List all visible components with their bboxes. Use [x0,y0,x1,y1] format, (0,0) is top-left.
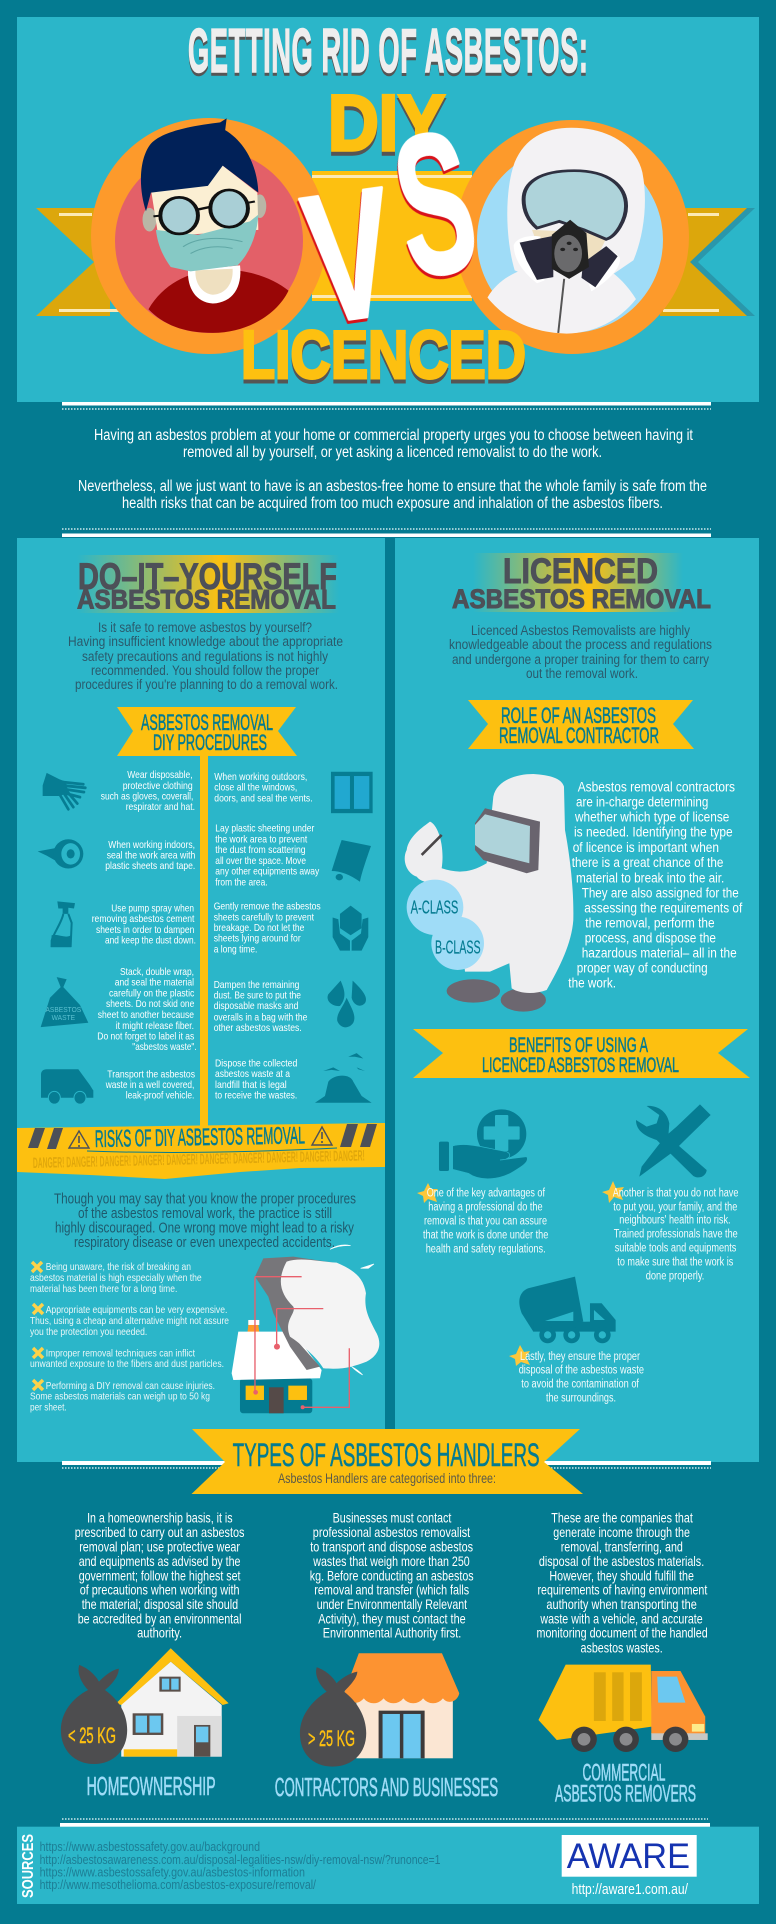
text: commercial description [536,1510,708,1655]
heading: licenced asbestos removal: LICENCED [503,552,658,591]
icon: plastic sheet [332,840,371,882]
icon: waste bag: ASBESTOS [45,1007,82,1014]
text: licenced intro: out the removal work. [526,666,638,681]
banner: diy procedures: DIY PROCEDURES [153,730,267,755]
list: risks: Performing a DIY removal can cause injuries. [46,1380,215,1392]
icon: waste bag: WASTE [52,1015,75,1022]
procedure steps right: asbestos waste at a [215,1068,290,1080]
procedure steps right: Lay plastic sheeting under [215,823,315,835]
procedure steps right [214,771,321,1102]
text: benefit one: One of the key advantages of [427,1188,546,1200]
illustration: shop with large bag [300,1653,459,1767]
panel: sources [17,1827,759,1904]
procedure steps right: Dampen the remaining [214,979,300,991]
procedure steps left: Wear disposable, [127,769,193,781]
text: benefit one: having a professional do the [428,1202,543,1214]
panel: licenced [395,538,759,1462]
text: benefit two: suitable tools and equipments [615,1242,737,1254]
icon: spray bottle [51,901,75,947]
icon: masked homeowner portrait [91,118,327,354]
text: contractor role: the work. [568,976,616,991]
procedure steps left: respirator and hat. [126,801,195,813]
heading: licenced: LICENCED [241,317,526,393]
heading: licenced asbestos removal: ASBESTOS REMOVAL [452,584,711,614]
procedure steps right: sheets lying around for [214,933,301,945]
procedure steps right: from the area. [215,876,268,888]
text: contractor role: the removal, perform the [585,915,715,930]
icon: landfill [315,1053,372,1103]
panel: hero [17,17,759,402]
icon: hand with cross [439,1109,527,1179]
banner: types of asbestos handlers: TYPES OF ASBESTOS HANDLERS [233,1437,540,1473]
text: commercial description: waste with a vehicle, and accurate [540,1610,703,1626]
procedure steps left: leak-proof vehicle. [126,1090,194,1102]
banner: role of contractor: REMOVAL CONTRACTOR [499,723,659,748]
icon: licenced removalist portrait [455,120,689,354]
divider rule below intro [62,529,711,537]
procedure steps right: Gently remove the asbestos [214,901,321,913]
panel: do-it-yourself [17,538,385,1462]
text: commercial description: However, they should fulfill the [549,1567,694,1583]
procedure steps right: sheets carefully to prevent [214,911,314,923]
banner: role of contractor: ROLE OF AN ASBESTOS [501,703,656,728]
text: businesses description: kg. Before conducting an asbestos [310,1567,474,1583]
list: source urls: http://www.mesothelioma.com/asbestos-exposure/removal/ [40,1878,316,1892]
text: benefit two: to make sure that the work is [617,1256,733,1268]
text: businesses description [310,1510,474,1641]
text: homeownership description: prescribed to carry out an asbestos [75,1524,244,1540]
procedure steps right: dust. Be sure to put the [214,990,301,1002]
text: contractor role: whether which type of license [574,810,729,825]
procedure steps right: close all the windows, [214,782,297,794]
text: benefit three: the surroundings. [546,1392,616,1404]
procedure steps right: disposable masks and [214,1000,299,1012]
text: homeownership description: government; follow the highest set [79,1567,241,1583]
text: businesses description: professional asbestos removalist [313,1524,470,1540]
versus lettering [293,89,491,363]
text: commercial description: disposal of the asbestos materials. [539,1553,704,1569]
text: risks paragraph: highly discouraged. One wrong move might lead to a risky [55,1220,354,1236]
procedure steps left: sheets in order to dampen [96,924,194,936]
heading: sources: SOURCES [20,1834,37,1898]
text: benefit two: Trained professionals have the [614,1228,738,1240]
text: commercial description: asbestos wastes. [580,1639,663,1655]
procedure steps left: Use pump spray when [111,902,194,914]
procedure steps left: plastic sheets and tape. [105,860,195,872]
banner: risks of diy asbestos removal [17,1122,385,1179]
spine of procedures [200,750,208,1126]
procedure steps right: the dust from scattering [215,844,306,856]
text: benefit three: to avoid the contamination of [521,1378,640,1390]
intro text: removed all by yourself, or yet asking a licenced removalist to do the work. [183,444,602,461]
text: contractor role: process, and dispose the [585,930,716,945]
text: homeownership description: and equipments as advised by the [79,1553,241,1569]
list: risks: Some asbestos materials can weigh up to 50 kg [30,1390,210,1402]
text: risks paragraph: Though you may say that you know the proper procedures [54,1190,356,1208]
procedure steps right: overalls in a bag with the [214,1011,308,1023]
banner: types of asbestos handlers: Asbestos Handlers are categorised into three: [278,1470,496,1486]
procedure steps left: and seal the material [115,977,194,989]
procedure steps right: other asbestos wastes. [214,1022,302,1034]
banner: diy procedures: ASBESTOS REMOVAL [141,710,273,735]
list: risks: Being unaware, the risk of breaking an [46,1261,191,1273]
intro text [78,427,707,512]
text: contractor role [568,780,743,991]
list: risks: you the protection you needed. [30,1326,147,1338]
list: source urls: https://www.asbestossafety.gov.au/asbestos-information [40,1866,305,1880]
benefit icons [439,1104,711,1343]
text: homeownership description: the material; disposal site should [82,1596,238,1612]
text: homeownership description: authority. [137,1625,182,1641]
text: businesses description: wastes that weigh more than 250 [313,1553,470,1569]
title: getting rid of asbestos: GETTING RID OF ASBESTOS: [188,18,588,86]
heading: do-it-yourself asbestos removal: ASBESTOS REMOVAL [77,584,336,614]
procedure steps left: Do not forget to label it as [97,1031,194,1043]
procedure steps left: it might release fiber. [116,1020,194,1032]
procedure steps left: waste in a well covered, [105,1079,194,1091]
list: risks [30,1261,229,1414]
illustration: house with asbestos cloud [232,1245,379,1413]
text: risks paragraph: respiratory disease or even unexpected accidents. [74,1234,335,1251]
text: website: http://aware1.com.au/ [572,1881,689,1898]
text: contractor role: They are also assigned for the [582,885,739,900]
procedure steps left: Stack, double wrap, [120,966,194,978]
divider rule above sources [60,1819,710,1827]
procedure steps left: protective clothing [123,780,193,792]
circle: a-class [407,880,463,935]
divider rule top [62,402,711,409]
list: source urls: http://asbestosawareness.com.au/disposal-legalities-nsw/diy-removal-nsw/?runonce=1 [40,1853,441,1867]
text: commercial description: removal, transferring, and [561,1539,683,1555]
icon: delivery van [41,1069,93,1104]
list: risks: Improper removal techniques can inflict [46,1348,195,1360]
heading: DIY: DIY [328,78,445,167]
text: homeownership description: removal plan; use protective wear [79,1539,240,1555]
procedure steps right: to receive the wastes. [215,1090,297,1102]
text: homeownership description: In a homeownership basis, it is [87,1510,233,1526]
circle: b-class [431,917,484,970]
text: businesses description: Environmental Authority first. [323,1625,461,1641]
procedure steps left: carefully on the plastic [109,987,194,999]
procedure steps left: and keep the dust down. [105,934,196,946]
text: is it safe: procedures if you're planning to do a removal work. [75,677,338,692]
procedure steps left: When working indoors, [108,839,195,851]
text: benefit three: Lastly, they ensure the proper [520,1351,640,1363]
text: homeownership description: of precautions when working with [80,1582,240,1598]
divider rule above handlers [62,1461,711,1468]
text: benefit one: health and safety regulations. [426,1243,546,1255]
text: contractor role: proper way of conducting [577,961,708,976]
procedure steps left: "asbestos waste". [132,1041,197,1053]
list: risks: material has been there for a long time. [30,1283,177,1295]
procedure steps left [92,769,197,1102]
list: risks: Appropriate equipments can be very expensive. [46,1304,227,1316]
text: commercial description: requirements of having environment [538,1582,707,1598]
text: is it safe: safety precautions and regulations is not highly [82,649,328,664]
text: benefit three: disposal of the asbestos waste [519,1365,644,1377]
text: benefit three [519,1351,644,1404]
banner: benefits: BENEFITS OF USING A [509,1034,648,1057]
text: commercial description: authority when transporting the [546,1596,697,1612]
list: source urls [40,1840,441,1892]
text: is it safe: Having insufficient knowledge about the appropriate [68,634,343,649]
procedure steps right: a long time. [214,943,257,955]
list: risks: Thus, using a cheap and alternative might not assure [30,1315,229,1327]
label: commercial asbestos removers [555,1760,696,1808]
text: commercial description: generate income through the [553,1524,690,1540]
text: businesses description: Businesses must contact [333,1510,451,1526]
procedure steps right: When working outdoors, [214,771,307,783]
text: risks paragraph [54,1190,356,1251]
icon: water drops [328,981,366,1027]
text: benefit two: done properly. [646,1270,704,1282]
text: is it safe [68,620,343,692]
text: homeownership description [75,1510,244,1641]
label: homeownership: HOMEOWNERSHIP [87,1771,216,1801]
procedure steps left: such as gloves, coverall, [101,791,193,803]
list: risks: per sheet. [30,1402,67,1414]
icon: waste bag [41,977,88,1027]
versus lettering: V [293,149,406,363]
heading: do-it-yourself asbestos removal [77,555,339,614]
procedure steps right: Dispose the collected [215,1057,297,1069]
text: homeownership description: be accredited by an environmental [78,1610,242,1626]
text: contractor role: assessing the requirements of [584,900,743,915]
procedure steps left: sheet to another because [98,1009,194,1021]
procedure steps right: doors, and seal the vents. [214,792,313,804]
procedure steps left: removing asbestos cement [92,913,194,925]
intro text: health risks that can be acquired from too much exposure and inhalation of the asbestos fibers. [122,495,663,512]
icon: window [331,772,373,813]
text: benefit one: removal is that you can assure [424,1216,547,1228]
text: commercial description: These are the companies that [551,1510,693,1526]
text: contractor role: there is a great chance of the [572,855,723,870]
logo: aware: AWARE [567,1837,690,1876]
text: businesses description: under Environmentally Relevant [317,1596,467,1612]
procedure steps right: the work area to prevent [215,833,307,845]
text: benefit one: that the work is done under the [423,1229,548,1241]
banner: benefits [413,1029,750,1078]
label: over 25 kg: > 25 KG [308,1726,355,1751]
procedure steps right: any other equipments away [215,866,320,878]
banner: role of contractor [468,700,694,749]
icon: hands holding box [333,906,368,951]
procedure steps right: all over the space. Move [215,855,306,867]
icon: tape roll [38,839,83,869]
banner: risks of diy asbestos removal: RISKS OF DIY ASBESTOS REMOVAL [95,1122,305,1153]
text: contractor role: of licence is important when [573,840,719,855]
illustration: waste truck [538,1665,708,1752]
text: commercial description: monitoring document of the handled [536,1625,708,1641]
text: businesses description: Activity), they must contact the [318,1610,466,1626]
text: is it safe: recommended. You should follow the proper [91,663,319,678]
text: contractor role: Asbestos removal contractors [578,780,735,795]
list: risks: asbestos material is high especially when the [30,1272,202,1284]
circle: b-class: B-CLASS [435,936,481,957]
ribbon behind versus [36,171,755,316]
text: benefit one [423,1188,548,1255]
text: licenced intro [449,623,712,681]
illustration: suited contractor with classes [405,774,573,1012]
heading: licenced asbestos removal [452,552,711,614]
list: risks: unwanted exposure to the fibers and dust particles. [30,1358,224,1370]
label: under 25 kg: < 25 KG [68,1723,116,1748]
text: licenced intro: Licenced Asbestos Removalists are highly [471,623,690,638]
text: risks paragraph: of the asbestos removal work, the practice is still [78,1205,332,1222]
text: benefit two [613,1187,738,1282]
icon: mixer truck [519,1277,616,1343]
text: is it safe: Is it safe to remove asbestos by yourself? [98,620,312,635]
text: contractor role: hazardous material– all in the [582,946,737,961]
illustration: house with small bag [61,1648,229,1764]
procedure steps right: breakage. Do not let the [214,922,305,934]
text: businesses description: removal and transfer (which falls [314,1582,469,1598]
procedure icons [38,772,373,1104]
text: benefit two: to put you, your family, and the [613,1201,737,1213]
banner: types of asbestos handlers [192,1429,583,1494]
banner: diy procedures [117,707,297,756]
text: businesses description: to transport and dispose asbestos [310,1539,473,1555]
list: source urls: https://www.asbestossafety.gov.au/background [40,1840,260,1854]
versus lettering: S [380,89,491,321]
heading: do-it-yourself asbestos removal: DO–IT–YOURSELF [78,556,337,597]
text: contractor role: is needed. Identifying the type [574,825,733,840]
label: commercial asbestos removers: COMMERCIAL [582,1760,666,1787]
procedure steps left: Transport the asbestos [107,1068,195,1080]
text: contractor role: material to break into the air. [576,870,724,885]
label: contractors and businesses: CONTRACTORS AND BUSINESSES [275,1772,498,1802]
icon: wrench and screwdriver [636,1104,711,1177]
text: contractor role: are in-charge determining [576,795,708,810]
procedure steps right: landfill that is legal [215,1079,287,1091]
icon: gloves [43,773,85,809]
procedure steps left: seal the work area with [107,850,196,862]
circle: a-class: A-CLASS [411,896,458,917]
procedure steps left: sheets. Do not skid one [106,998,194,1010]
text: DANGER! DANGER! DANGER! DANGER! DANGER! DANGER! DANGER! DANGER! DANGER! DANGER! [33,1147,365,1172]
text: benefit two: Another is that you do not have [613,1187,738,1199]
benefit stars [417,1181,624,1366]
text: licenced intro: knowledgeable about the process and regulations [449,637,712,652]
text: benefit two: neighbours' health into risk. [619,1215,731,1227]
text: licenced intro: and undergone a proper training for them to carry [452,652,709,667]
